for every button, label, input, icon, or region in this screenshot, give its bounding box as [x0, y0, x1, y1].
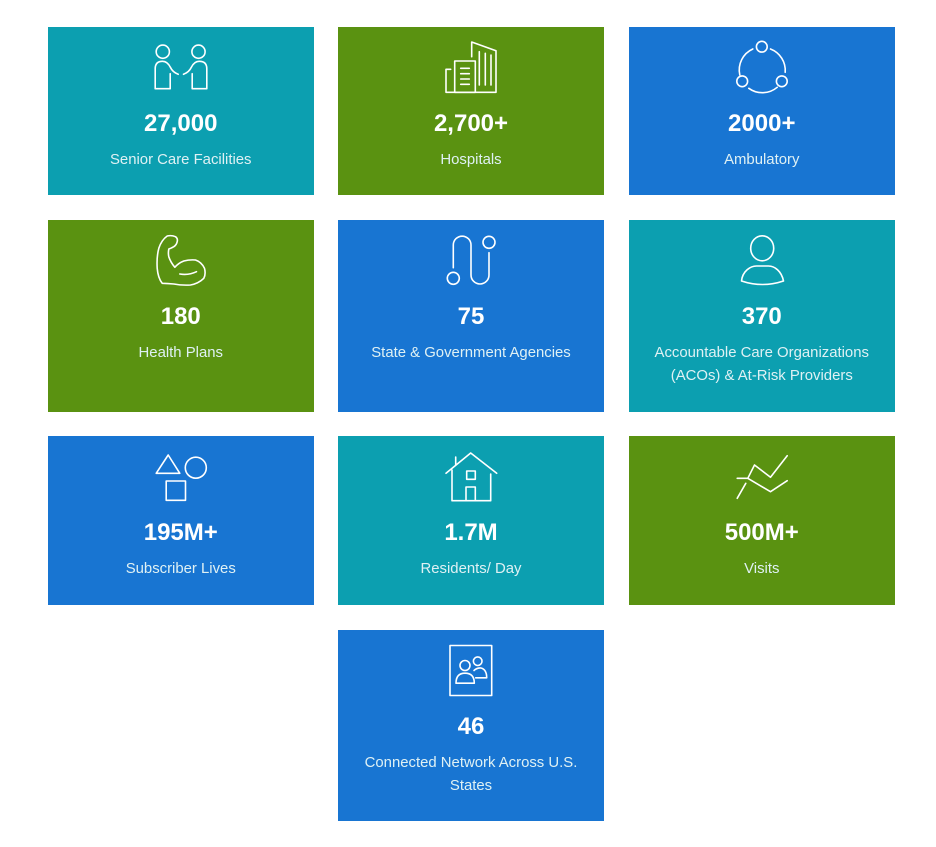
- icon: flexed arm: [156, 234, 206, 286]
- icon: hospital buildings: [445, 41, 497, 94]
- card: senior care facilities: [48, 27, 314, 195]
- label: accountable care organizations: Accountable Care Organizations: [655, 345, 869, 361]
- stat: 2,700+: 2,700+: [434, 110, 508, 137]
- stat: 46: 46: [458, 712, 484, 740]
- icon: triangle, circle and square: [155, 454, 208, 502]
- stat: 195M+: 195M+: [144, 519, 218, 546]
- label: accountable care organizations: [654, 345, 869, 384]
- card: ambulatory: [628, 27, 895, 195]
- label: visits: Visits: [744, 561, 779, 577]
- stat: 500M+: 500M+: [725, 519, 799, 546]
- label: state and government agencies: State & Government Agencies: [371, 345, 571, 361]
- label: senior care facilities: Senior Care Facilities: [110, 152, 252, 168]
- stat: 2000+: 2000+: [728, 110, 795, 137]
- icon: three connected circles: [736, 40, 788, 94]
- label: connected network: [365, 754, 577, 794]
- label: ambulatory: Ambulatory: [724, 152, 799, 168]
- stat: 27,000: 27,000: [144, 110, 217, 137]
- label: connected network: Connected Network Across U.S.: [365, 754, 577, 770]
- card: state and government agencies: [338, 220, 604, 412]
- label: subscriber lives: Subscriber Lives: [126, 561, 236, 577]
- stat: 370: 370: [742, 303, 782, 330]
- card: health plans: [48, 220, 314, 412]
- card: accountable care organizations: [628, 220, 895, 412]
- card: subscriber lives: [48, 436, 314, 604]
- label: health plans: Health Plans: [139, 345, 223, 361]
- card: residents per day: [338, 436, 604, 604]
- icon: line chart: [736, 454, 788, 500]
- icon: two people shaking hands: [154, 44, 208, 90]
- card: hospitals: [338, 27, 604, 195]
- stat: 75: 75: [458, 303, 484, 330]
- stat: 1.7M: 1.7M: [444, 519, 498, 546]
- label: residents per day: Residents/ Day: [420, 561, 521, 577]
- label: accountable care organizations: (ACOs) & At-Risk Providers: [671, 368, 853, 384]
- icon: house: [445, 452, 498, 502]
- icon: people in a frame: [449, 644, 492, 696]
- card: visits: [628, 436, 895, 604]
- label: hospitals: Hospitals: [440, 152, 502, 168]
- icon: winding route: [446, 235, 496, 286]
- card: connected network: [338, 630, 604, 821]
- icon: person: [740, 235, 784, 286]
- label: connected network: States: [450, 778, 492, 794]
- stat: 180: 180: [161, 303, 201, 330]
